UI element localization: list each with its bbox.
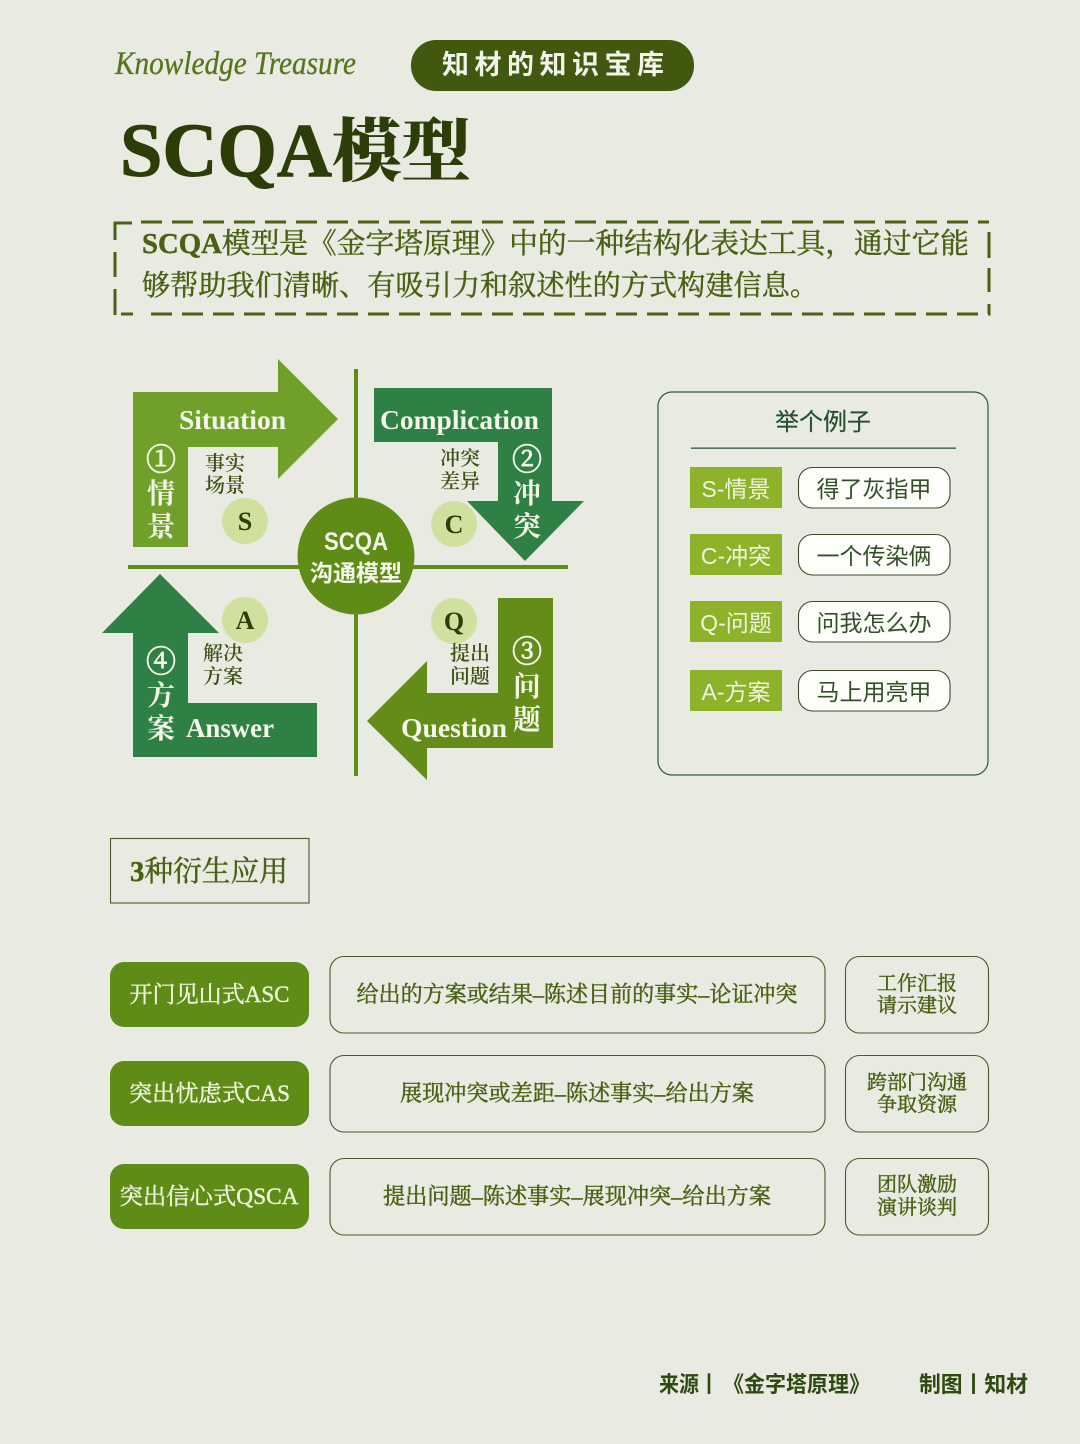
- title: [120, 109, 471, 193]
- example row C: [690, 534, 950, 575]
- label: A: 解决: [203, 642, 243, 665]
- arrow: Question: Question: [401, 713, 507, 743]
- arrow: Answer: Answer: [186, 713, 274, 743]
- example row C: C-冲突: [701, 543, 771, 569]
- arrow: Complication: 冲: [513, 478, 541, 510]
- label: S: [205, 452, 268, 544]
- label: Q: [431, 598, 490, 688]
- example row S: [690, 467, 950, 508]
- arrow: Question: 问: [513, 671, 541, 703]
- center badge: SCQA: [324, 528, 388, 556]
- example row A: 马上用亮甲: [816, 679, 932, 705]
- panel heading: 举个例子: [775, 409, 871, 436]
- panel: example: [658, 392, 988, 775]
- row: ASC: [110, 956, 988, 1033]
- label: Q: Q: [444, 607, 464, 636]
- row: CAS: [110, 1056, 988, 1132]
- arrow: Answer: 案: [147, 712, 175, 745]
- label: C: [431, 447, 480, 547]
- brand pill: [411, 40, 694, 91]
- label: C: 差异: [440, 470, 480, 493]
- brand pill: 知材的知识宝库: [442, 43, 664, 82]
- arrow: Situation: ①: [146, 444, 176, 477]
- label: A: 方案: [203, 665, 243, 688]
- arrow: Question: ③: [512, 636, 542, 669]
- row: CAS: 展现冲突或差距–陈述事实–给出方案: [400, 1081, 754, 1106]
- intro text box: 够帮助我们清晰、有吸引力和叙述性的方式构建信息。: [142, 270, 818, 302]
- example row S: S-情景: [702, 476, 770, 502]
- footer: source: 来源丨: [659, 1372, 719, 1397]
- arrow: Answer: 方: [147, 680, 175, 712]
- example row Q: [690, 601, 950, 642]
- label: A: A: [236, 606, 255, 635]
- intro text box: [115, 222, 989, 315]
- arrow: Complication: 突: [513, 511, 541, 543]
- arrow: Situation: 景: [147, 511, 176, 543]
- example row S: 得了灰指甲: [816, 476, 932, 502]
- row: QSCA: 突出信心式QSCA: [120, 1184, 299, 1209]
- label: C: C: [445, 510, 463, 539]
- section heading: 3种衍生应用: [130, 855, 288, 888]
- arrow: Situation: [133, 359, 338, 547]
- arrow: Answer: [102, 574, 317, 757]
- arrow: Question: 题: [513, 703, 541, 736]
- label: S: S: [238, 507, 252, 536]
- row: QSCA: 演讲谈判: [877, 1196, 957, 1219]
- row: CAS: 突出忧虑式CAS: [129, 1081, 290, 1106]
- row: ASC: 给出的方案或结果–陈述目前的事实–论证冲突: [356, 982, 798, 1007]
- label: S: 事实: [205, 452, 245, 475]
- row: QSCA: 提出问题–陈述事实–展现冲突–给出方案: [383, 1184, 771, 1209]
- row: QSCA: 团队激励: [877, 1173, 957, 1196]
- SCQA diagram: [102, 359, 584, 780]
- arrow: Complication: Complication: [380, 405, 539, 435]
- row: QSCA: [110, 1158, 988, 1235]
- arrow: Complication: [374, 388, 584, 561]
- center badge: 沟通模型: [310, 560, 402, 586]
- example row A: A-方案: [702, 679, 770, 705]
- label: A: [203, 597, 268, 688]
- footer: credit: 制图丨知材: [919, 1372, 1028, 1397]
- label: Q: 问题: [450, 665, 490, 688]
- footer: source: 《金字塔原理》: [723, 1372, 870, 1397]
- arrow: Situation: 情: [147, 478, 175, 510]
- title: 模型: [332, 114, 471, 190]
- arrow: Question: [367, 598, 553, 780]
- label: S: 场景: [205, 474, 245, 497]
- label: Q: 提出: [450, 642, 490, 665]
- arrow: Situation: Situation: [179, 405, 286, 435]
- section heading: [110, 838, 309, 903]
- row: CAS: 跨部门沟通: [867, 1071, 967, 1094]
- arrow: Answer: ④: [146, 646, 176, 679]
- example row C: 一个传染俩: [816, 543, 932, 569]
- example row A: [690, 670, 950, 711]
- arrow: Complication: ②: [512, 444, 542, 477]
- footer: source: [659, 1372, 870, 1397]
- title: SCQA: [120, 109, 332, 193]
- row: CAS: 争取资源: [877, 1093, 958, 1116]
- brand tagline: Knowledge Treasure: [114, 46, 356, 82]
- label: C: 冲突: [440, 447, 480, 470]
- row: ASC: 开门见山式ASC: [130, 982, 290, 1007]
- row: ASC: 请示建议: [877, 994, 957, 1017]
- example row Q: Q-问题: [700, 610, 772, 636]
- row: ASC: 工作汇报: [877, 972, 957, 995]
- center badge: [298, 498, 414, 614]
- example row Q: 问我怎么办: [816, 610, 932, 636]
- intro text box: SCQA模型是《金字塔原理》中的一种结构化表达工具，通过它能: [142, 228, 969, 260]
